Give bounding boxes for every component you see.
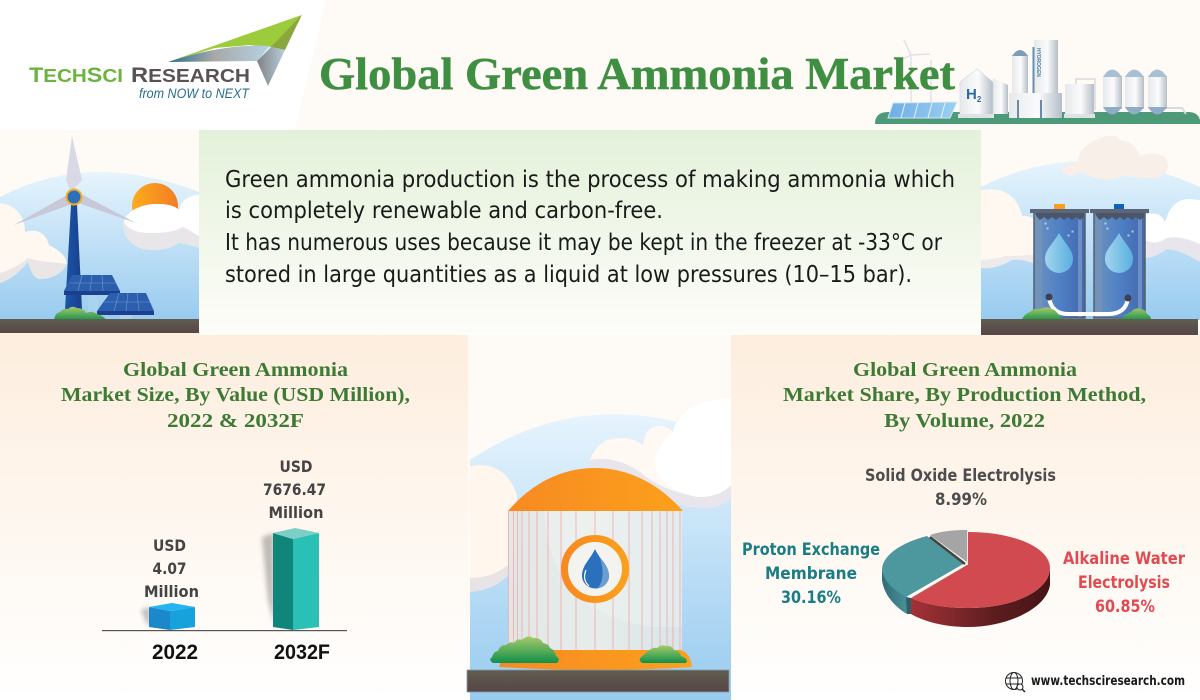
icon: globe bbox=[1006, 672, 1025, 692]
label: alkaline water bbox=[1063, 549, 1186, 617]
bar chart: 7676.47 bbox=[263, 480, 326, 499]
icon: sun bbox=[132, 183, 178, 210]
bar chart: USD bbox=[153, 536, 186, 555]
ground bbox=[467, 670, 729, 692]
icon: wind turbine bbox=[14, 136, 136, 310]
panel: market share bbox=[731, 335, 1200, 700]
label: proton exchange: 30.16% bbox=[781, 588, 841, 608]
logo: TechSci Research: RESEARCH bbox=[131, 64, 250, 87]
heading: market size: Global Green Ammonia bbox=[123, 359, 348, 381]
icon: water drop bbox=[582, 549, 609, 588]
panel: description text: It has numerous uses because it may be kept in the freezer at -33°C or bbox=[225, 230, 942, 256]
bar chart: 2032F bbox=[274, 641, 330, 664]
label: solid oxide: Solid Oxide Electrolysis bbox=[865, 466, 1056, 486]
icon: bushes bbox=[54, 306, 106, 319]
title: Global Green Ammonia Market bbox=[319, 49, 955, 99]
label: alkaline water: Electrolysis bbox=[1078, 573, 1170, 593]
panel: electrolyser scene bbox=[981, 130, 1200, 335]
icon: bushes bbox=[490, 636, 559, 663]
label: alkaline water: Alkaline Water bbox=[1063, 549, 1186, 569]
ground bbox=[0, 319, 199, 333]
bar chart: Million bbox=[268, 503, 324, 522]
label: proton exchange bbox=[742, 540, 880, 608]
bar chart: Million bbox=[144, 582, 199, 601]
heading: market share: By Volume, 2022 bbox=[884, 410, 1045, 432]
icon: solar panels bbox=[64, 275, 154, 320]
heading: market share: Global Green Ammonia bbox=[853, 359, 1077, 381]
cloud left bbox=[0, 228, 67, 283]
panel: wind and solar scene bbox=[0, 130, 199, 335]
cloud behind bbox=[588, 459, 731, 508]
header background bbox=[0, 0, 1200, 130]
illustration: hydrogen plant: HYDROGEN bbox=[1035, 48, 1041, 77]
cloud right bbox=[123, 204, 199, 250]
cloud left bbox=[470, 564, 508, 592]
icon: connecting pipe bbox=[1046, 294, 1132, 314]
cloud left bbox=[981, 216, 1034, 268]
label: alkaline water: 60.85% bbox=[1095, 597, 1155, 617]
label: solid oxide: 8.99% bbox=[935, 490, 987, 510]
heading: market share bbox=[783, 359, 1146, 432]
icon: storage tank bbox=[499, 468, 692, 670]
bar chart: 4.07 bbox=[152, 559, 186, 578]
icon: bushes bbox=[1022, 307, 1151, 319]
heading: market size bbox=[61, 359, 410, 432]
illustration: hydrogen plant bbox=[875, 40, 1200, 124]
label: proton exchange: Proton Exchange bbox=[742, 540, 880, 560]
heading: market size: Market Size, By Value (USD Million), bbox=[61, 384, 410, 406]
cloud top bbox=[1061, 135, 1168, 179]
panel: storage tank scene bbox=[467, 335, 731, 700]
label: solid oxide bbox=[865, 466, 1056, 510]
pie chart bbox=[882, 530, 1050, 627]
heading: market size: 2022 & 2032F bbox=[167, 410, 304, 432]
logo: TechSci Research bbox=[29, 15, 302, 101]
bar chart: 2022 bbox=[152, 641, 198, 664]
panel: description text: is completely renewable and carbon-free. bbox=[225, 198, 663, 224]
ground bbox=[981, 319, 1198, 335]
icon: electrolyser tank right bbox=[1090, 204, 1149, 318]
panel: description text: Green ammonia production is the process of making ammonia which bbox=[225, 167, 955, 193]
logo: TechSci Research: TECHSCI bbox=[29, 64, 123, 87]
panel: description text: stored in large quantities as a liquid at low pressures (10–15 bar). bbox=[225, 262, 912, 288]
illustration: hydrogen plant: H bbox=[966, 86, 977, 103]
logo: TechSci Research: from NOW to NEXT bbox=[139, 85, 250, 101]
illustration: hydrogen plant: 2 bbox=[977, 95, 982, 104]
bar chart: USD bbox=[280, 457, 312, 476]
label: proton exchange: Membrane bbox=[765, 564, 857, 584]
heading: market share: Market Share, By Production Method, bbox=[783, 384, 1146, 406]
bar chart bbox=[102, 457, 347, 664]
panel: market size bbox=[0, 335, 468, 700]
icon: electrolyser tank left bbox=[1030, 204, 1089, 318]
cloud right bbox=[1146, 237, 1200, 262]
panel: description text bbox=[199, 130, 981, 335]
